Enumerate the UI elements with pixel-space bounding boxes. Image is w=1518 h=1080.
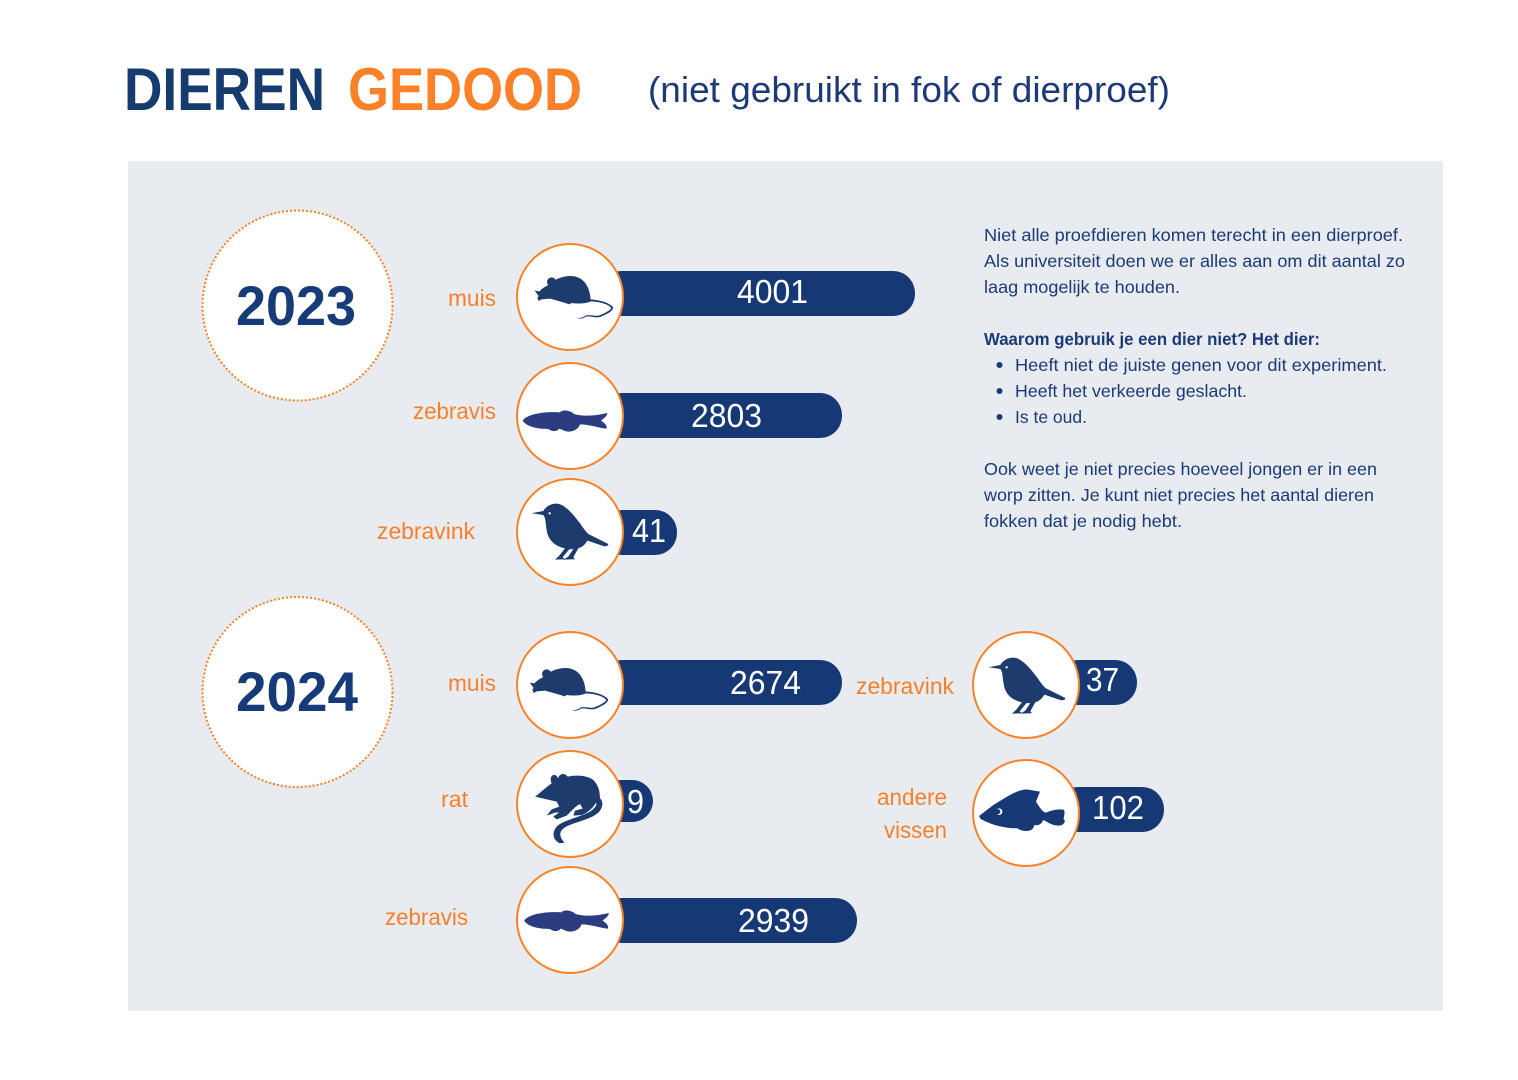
- row: muis 2024: 2674: [730, 664, 801, 701]
- explanatory text: Is te oud.: [1015, 407, 1087, 427]
- row: muis 2024: muis: [448, 670, 496, 696]
- year badge 2024: 2024: [236, 660, 358, 723]
- explanatory text: laag mogelijk te houden.: [984, 277, 1180, 297]
- row: andere vissen 2024: 102: [1092, 789, 1144, 826]
- row: andere vissen 2024: vissen: [884, 817, 947, 843]
- title: GEDOOD: [348, 56, 582, 123]
- row: zebravis 2024: zebravis: [385, 904, 468, 930]
- row: andere vissen 2024: andere: [877, 784, 947, 810]
- explanatory text: Heeft het verkeerde geslacht.: [1015, 381, 1247, 401]
- row: rat 2024: [441, 751, 653, 857]
- row: zebravink 2024: 37: [1086, 661, 1119, 698]
- row: zebravink 2023: 41: [632, 512, 666, 549]
- year badge 2023: 2023: [236, 274, 356, 337]
- title: [124, 56, 582, 123]
- row: zebravink 2023: [377, 479, 677, 585]
- panel: background: [128, 161, 1443, 1011]
- year badge 2023: [202, 210, 392, 400]
- row: zebravis 2023: [413, 363, 842, 469]
- row: rat 2024: 9: [627, 783, 644, 820]
- row: muis 2023: [448, 244, 915, 350]
- explanatory text: Als universiteit doen we er alles aan om dit aantal zo: [984, 251, 1405, 271]
- row: muis 2023: 4001: [737, 273, 808, 310]
- title: DIEREN: [124, 56, 325, 123]
- row: zebravink 2024: [856, 632, 1137, 738]
- subtitle: (niet gebruikt in fok of dierproef): [648, 69, 1170, 110]
- row: zebravis 2024: [385, 867, 857, 973]
- row: rat 2024: rat: [441, 786, 469, 812]
- explanatory text: Heeft niet de juiste genen voor dit experiment.: [1015, 355, 1387, 375]
- explanatory text: Ook weet je niet precies hoeveel jongen er in een: [984, 459, 1377, 479]
- year badge 2024: [202, 597, 392, 787]
- row: zebravis 2024: 2939: [738, 902, 809, 939]
- explanatory text: [983, 225, 1405, 531]
- row: zebravis 2023: zebravis: [413, 398, 496, 424]
- row: zebravink 2023: zebravink: [377, 518, 475, 544]
- explanatory text: Waarom gebruik je een dier niet? Het dier:: [984, 329, 1320, 349]
- explanatory text: fokken dat je nodig hebt.: [984, 511, 1182, 531]
- explanatory text: worp zitten. Je kunt niet precies het aantal dieren: [983, 485, 1374, 505]
- row: muis 2024: [448, 632, 842, 738]
- explanatory text: Niet alle proefdieren komen terecht in een dierproef.: [984, 225, 1403, 245]
- row: andere vissen 2024: [877, 760, 1164, 866]
- row: muis 2023: muis: [448, 285, 496, 311]
- row: zebravis 2023: 2803: [691, 397, 762, 434]
- row: zebravink 2024: zebravink: [856, 673, 954, 699]
